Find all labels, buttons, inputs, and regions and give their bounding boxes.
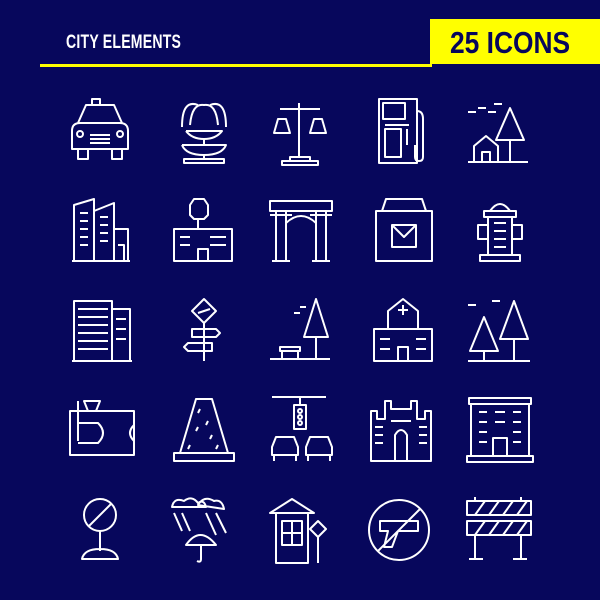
icon: house with sign <box>270 499 326 563</box>
title: CITY ELEMENTS <box>66 32 181 53</box>
icon: street lamp <box>274 103 326 165</box>
icon: apartment block <box>467 398 533 462</box>
icon: house & tree <box>468 104 528 162</box>
icon: direction sign <box>184 299 220 361</box>
icon: church / school <box>374 299 432 361</box>
icon: brick building <box>72 301 132 361</box>
badge: 25 icons <box>430 19 600 64</box>
icon: police car <box>72 99 128 159</box>
icon: trees <box>468 301 530 361</box>
icon: gas pump <box>379 99 423 163</box>
icon: building with sign <box>174 199 232 261</box>
icon: mailbox <box>376 199 432 261</box>
icon: castle <box>371 401 431 461</box>
icon: traffic light with cars <box>272 397 332 461</box>
icon: park bench <box>270 299 330 359</box>
icon: rain & umbrella <box>172 498 226 562</box>
icon: traffic cone <box>174 399 234 461</box>
icon: no stopping sign <box>82 499 118 559</box>
icon: gate <box>270 201 332 261</box>
icon: barricade <box>467 497 531 559</box>
icon: hydrant <box>478 204 522 261</box>
icon: no gun <box>369 500 429 560</box>
icon: basketball court <box>70 401 134 455</box>
icon: office buildings <box>72 199 130 261</box>
icon: fountain <box>182 104 226 163</box>
badge: 25 icons: 25 ICONS <box>450 25 570 60</box>
